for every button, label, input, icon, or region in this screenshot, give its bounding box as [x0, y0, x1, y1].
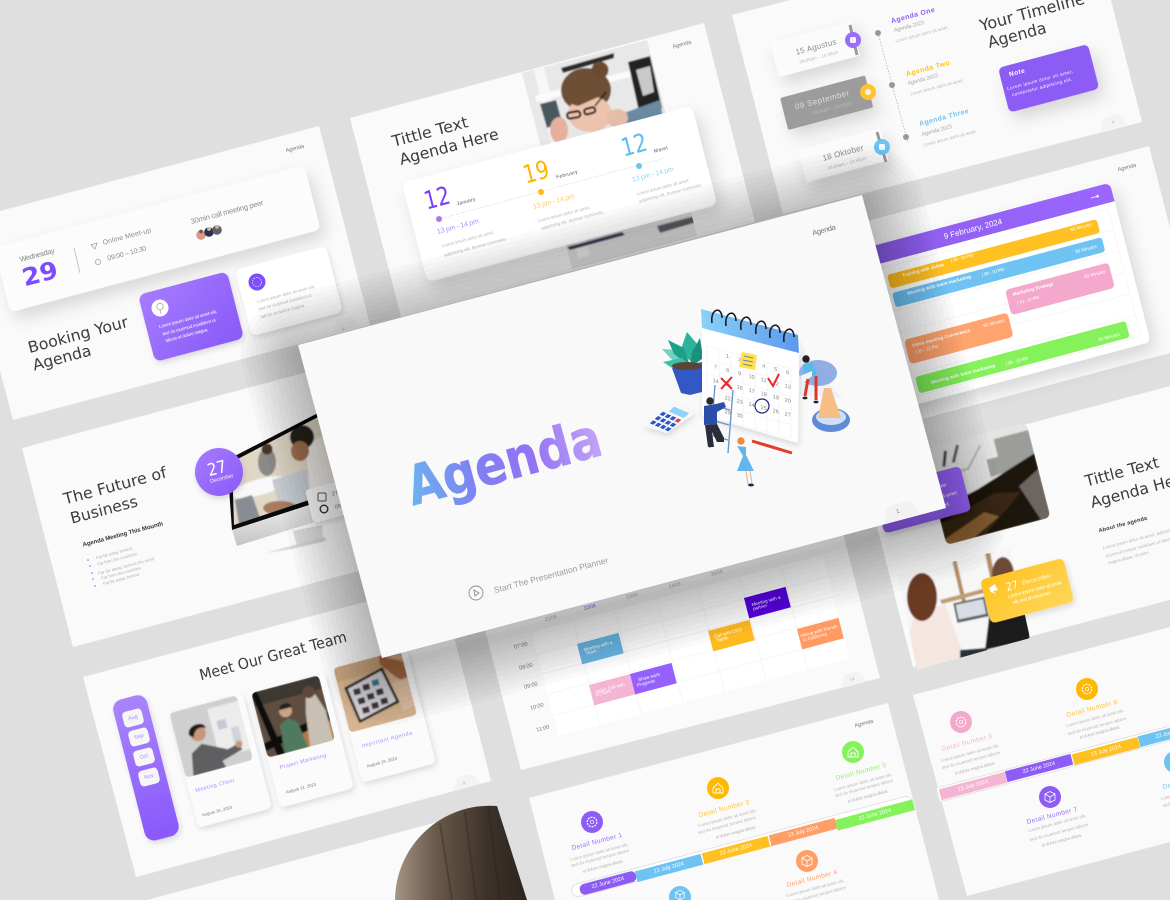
calendar table: 07:00 [514, 641, 528, 651]
timeline card with three dates: February [556, 169, 579, 181]
panel: cropped photo slide at bottom [147, 806, 527, 900]
calendar body: 2 [738, 357, 741, 364]
page number tab: 3 [341, 326, 345, 332]
calendar body: 16 [737, 384, 743, 392]
detail number 5: et dolore magna aliqua. [847, 788, 889, 804]
calendar body: 11 [761, 377, 767, 384]
timeline card with three dates: 12 [618, 128, 650, 162]
photo: lecture hall [930, 424, 1050, 544]
panel: daily schedule slide [792, 146, 1170, 440]
date ribbon: 13 July 2024 [1090, 744, 1122, 758]
detail number 5: Detail Number 5 [835, 762, 887, 782]
heading: tittle text agenda here: Agenda Here [397, 125, 501, 169]
event: meeting with a team: Team [585, 648, 597, 656]
date ribbon: 22 June 2024 [858, 808, 892, 822]
paragraph: magna aliqua. Ut enim. [1107, 550, 1150, 565]
schedule header: 9 February, 2024 [943, 217, 1004, 241]
heading: your timeline agenda: Agenda [986, 18, 1048, 52]
event: video meeting conrerence [904, 312, 1014, 364]
agenda label: Agenda [672, 39, 693, 50]
panel: future of business slide [22, 372, 358, 647]
event: marketing strategy: Marketing Strategy [1012, 281, 1054, 297]
detail number 8: et dolore magna aliqua. [1079, 724, 1121, 740]
heading: the future of business: The Future of [61, 463, 169, 509]
detail number 3: sed do eiusmod tempor labore [697, 815, 757, 835]
calendar table: 10:00 [530, 702, 544, 712]
detail number 3: Lorem ipsum dolor sit amet elit, [697, 808, 757, 828]
event: show work progress: Progress [637, 678, 656, 688]
event: video meeting conrerence: 60 Minutes [983, 318, 1006, 328]
paragraph [1102, 520, 1170, 565]
date card: 18 oktober [798, 128, 890, 182]
agenda items: Agenda 2023 [893, 20, 925, 34]
timeline card with three dates: 13 pm - 14 pm [436, 218, 480, 236]
photo: women at laptop [906, 552, 1030, 670]
timeline card with three dates: adipiscing elit. Aenean commodo [540, 209, 604, 231]
panel: about the agenda slide [862, 386, 1170, 675]
calculator [643, 402, 695, 433]
date card: 09 september: 09:00am – 10:30pm [812, 100, 852, 116]
event: meeting with a team [577, 633, 624, 664]
heading: booking your agenda [26, 313, 131, 374]
booking details card [0, 165, 321, 312]
calendar body: 4 [762, 363, 765, 370]
date badge: 27 december: 27 [205, 457, 229, 481]
date and time card [305, 475, 371, 523]
date badge: 27 december: December [210, 473, 234, 485]
team card: meeting client: August 16, 2023 [201, 804, 233, 817]
woman with clipboard [737, 437, 754, 486]
date and time card: 09 [334, 503, 342, 511]
date card: 18 oktober: 18 Oktober [822, 143, 865, 163]
team card: meeting client [169, 693, 272, 828]
calendar body: 14 [713, 378, 719, 386]
agenda label: Agenda [285, 143, 306, 154]
event: video call with a client [589, 674, 636, 705]
detail number 6: Lorem ipsum dolor sit amet elit, [940, 743, 1000, 763]
date ribbon: 22 June 2024 [719, 843, 753, 857]
panel: booking your agenda slide [0, 126, 370, 420]
yellow date card: 27 [1005, 578, 1019, 594]
date card: 09 september [780, 75, 876, 130]
timeline card with three dates: adipiscing elit. Aenean commodo [638, 182, 702, 204]
calendar body: 20 [785, 397, 791, 405]
agenda items: Agenda Two [905, 60, 951, 78]
date card: 15 agustus: 15 Agustus [795, 37, 837, 57]
calendar body [701, 309, 843, 443]
calendar body: 7 [714, 364, 717, 371]
event: hiking with friends: in California [803, 631, 828, 643]
team card: meeting client: Meeting Client [195, 778, 236, 794]
calendar body: 23 [737, 398, 743, 406]
calendar body: 22 [725, 395, 731, 403]
panel: detail timeline slide two [913, 627, 1170, 896]
heading: booking your agenda: Booking Your [26, 313, 131, 357]
timeline card with three dates: 19 [520, 155, 552, 189]
calendar table: 09:00 [524, 681, 538, 691]
event: call with ceo: Tatsik [716, 635, 729, 643]
calendar body: 8 [726, 368, 729, 374]
photo: round wooden interior [395, 806, 527, 900]
timeline card with three dates: 13 pm - 14 pm [631, 166, 675, 184]
calendar body: 15 [725, 381, 731, 389]
event: video meeting conrerence: | 11 – 12 PM [915, 344, 939, 354]
detail number 6: et dolore magna aliqua. [954, 760, 996, 776]
month sidebar: Sep [134, 733, 144, 741]
event: training with johns: Training with Johns [902, 262, 945, 278]
detail number 6 [940, 711, 1001, 776]
event: meeting with team marketing [892, 237, 1105, 308]
white note card: Lorem ipsum dolor sit amet elit, [256, 284, 316, 304]
event: show work progress: Show work [638, 672, 661, 682]
date card: 09 september: 09 September [794, 88, 850, 112]
panel: agenda cover slide [298, 195, 946, 658]
month sidebar: Nov [144, 773, 155, 781]
vertical dashed timeline [875, 30, 909, 143]
booking details card: Online Meet-up [102, 227, 152, 247]
agenda label: Agenda [854, 718, 875, 729]
page number tab: 1 [896, 508, 901, 515]
illustration: calendar with people [643, 309, 850, 486]
agenda items: Lorem ipsum dolor sit amet, [923, 128, 977, 148]
calendar body: 12 [773, 380, 779, 388]
calendar table: 21/09 [544, 614, 558, 623]
event: hiking with friends [797, 618, 844, 649]
detail number 4: Detail Number 4 [786, 869, 838, 889]
calendar body: 29 [725, 409, 731, 417]
event: training with johns: | 08 - 09 PM [950, 253, 974, 263]
team card: important agenda: August 19, 2023 [366, 755, 398, 768]
title: agenda: Agenda [400, 406, 608, 518]
calendar body: 24 [749, 402, 755, 409]
cover slide shadow [300, 204, 948, 667]
page number tab [450, 771, 482, 791]
calendar table: 23/09 [625, 592, 639, 601]
event: meeting with a team: Meeting with a [583, 640, 613, 652]
event: marketing strategy: | 10 - 11 PM [1016, 295, 1040, 305]
date card: 15 agustus [770, 21, 861, 77]
page number tab [878, 498, 923, 525]
purple note card: Lorem ipsum dolor sit amet, [1007, 69, 1073, 91]
photo: woman with glasses [522, 40, 697, 269]
purple note card [138, 271, 244, 362]
detail number 7: Detail Number 7 [1026, 806, 1078, 826]
bullet list: Far far away, behind [103, 572, 140, 586]
calendar table: 24/09 [668, 581, 682, 590]
bullet list: Far from the countries [101, 565, 142, 581]
page number tab [330, 314, 362, 334]
page number tab: 14 [849, 676, 856, 682]
calendar table: 22/09 [583, 603, 597, 612]
ladder and climbing man [704, 385, 733, 453]
calendar body: 6 [786, 370, 789, 377]
event: meeting with team marketing: Meeting with team marketing [907, 274, 972, 296]
timeline card with three dates: 13 pm - 14 pm [532, 193, 576, 211]
detail number 7: Lorem ipsum dolor sit amet elit, [1027, 813, 1087, 833]
calendar table [514, 555, 849, 736]
red pencil [752, 441, 792, 453]
page number tab [1097, 112, 1129, 132]
event: training with johns [887, 219, 1100, 289]
agenda items: Agenda 2023 [907, 73, 939, 87]
detail number 1: et dolore magna aliqua. [582, 858, 624, 874]
detail number 8: Lorem ipsum dolor sit amet elit, [1065, 708, 1125, 728]
purple note card: consectetur adipiscing elit. [1011, 77, 1073, 97]
bullet list: Far far away, behind the word [97, 556, 155, 576]
team card: project marketing: Project Marketing [279, 753, 327, 771]
timeline card with three dates: Lorem ipsum dolor sit amet, [636, 178, 690, 196]
detail number 9 [1160, 751, 1170, 808]
date card: 18 oktober: 09:00am – 10:30pm [827, 155, 867, 171]
heading: your timeline agenda [977, 0, 1087, 52]
detail number 8: Detail Number 8 [1066, 699, 1118, 719]
yellow date card [980, 558, 1074, 624]
agenda label: Agenda [1117, 162, 1138, 173]
page number tab [837, 669, 869, 689]
timeline card with three dates: Lorem ipsum dolor sit amet, [537, 205, 591, 223]
calendar table: 11:00 [536, 724, 550, 734]
detail number 8 [1065, 678, 1127, 740]
event: meeting with a partner [744, 587, 791, 618]
schedule header [820, 183, 1115, 278]
heading: the future of business [61, 463, 169, 528]
date badge: 27 december [195, 448, 243, 496]
booking details card: 09:00 – 10:30 [107, 245, 147, 263]
detail number 5 [833, 741, 894, 804]
white note card [235, 246, 343, 336]
agenda items: Lorem ipsum dolor sit amet, [910, 77, 964, 97]
detail number 3: Detail Number 3 [698, 799, 750, 819]
event: meeting with a partner: Meeting with a [751, 595, 781, 607]
timeline card with three dates [402, 106, 717, 282]
white note card: labore et dolore magna. [260, 303, 306, 319]
agenda items [890, 7, 977, 148]
event: meeting with team marketing: | 09 - 10 PM [981, 267, 1005, 277]
calendar body: 26 [773, 408, 779, 416]
event: meeting with team marketing green [915, 321, 1130, 394]
purple note card: Lorem ipsum dolor sit amet elit, [158, 309, 218, 329]
panel: weekly calendar slide [470, 479, 880, 770]
event: video call with a client: Video Call with [595, 682, 626, 694]
detail number 3: et dolore magna aliqua. [715, 824, 757, 840]
subheading: about the agenda: About the agenda [1098, 515, 1149, 534]
date ribbon: 13 July 2024 [957, 779, 989, 793]
bullet list [87, 546, 155, 587]
calendar body: 9 [738, 371, 741, 378]
detail number 5: Lorem ipsum dolor sit amet elit, [833, 772, 893, 792]
calendar body: 30 [737, 412, 743, 420]
purple note card: Note [1008, 67, 1026, 78]
calendar body: 27 [785, 411, 791, 419]
agenda items: Agenda One [890, 7, 936, 25]
calendar body: 13 [785, 383, 791, 391]
event: show work progress [630, 663, 677, 694]
calendar body: 5 [774, 367, 777, 373]
purple date card: elit, sed do eiusmod. [905, 501, 951, 519]
team card: project marketing [251, 673, 354, 808]
calendar body: 17 [749, 388, 755, 395]
event: hiking with friends: Hiking with friends [800, 624, 839, 638]
bullet list: Far from the countries [97, 551, 138, 567]
timeline card with three dates: 12 [421, 181, 453, 215]
timeline card with three dates: adipiscing elit. Aenean commodo [443, 236, 507, 258]
detail number 7: et dolore magna aliqua. [1041, 832, 1083, 848]
event: marketing strategy [1005, 262, 1115, 315]
month sidebar: Aug [128, 714, 138, 722]
detail number 8: sed do eiusmod tempor labore [1067, 716, 1127, 736]
event: training with johns: 60 Minutes [1070, 222, 1093, 232]
yellow date card: December [1022, 573, 1052, 587]
date card: 15 agustus: 09:00am – 10:30pm [799, 49, 839, 65]
date and time card: 27 [331, 490, 339, 498]
detail number 7: sed do eiusmod tempor labore [1029, 822, 1089, 842]
yellow date card: elit, sed do eiusmod. [1012, 590, 1052, 606]
subheading: Agenda Meeting This Mounth [82, 521, 164, 549]
date ribbon: 22 June 2024 [1022, 761, 1056, 775]
purple date card: Lorem ipsum dolor sit amet [898, 490, 958, 511]
agenda items: Agenda 2023 [921, 124, 953, 138]
date ribbon: 13 July 2024 [653, 861, 685, 875]
booking details card: 30min call meeting peer [190, 198, 265, 226]
calendar body: 1 [726, 354, 729, 360]
event: meeting with team marketing: 60 Minutes [1075, 244, 1098, 254]
white note card: sed do eiusmod incididunt ut [258, 292, 313, 312]
event: video call with a client: A Client [595, 688, 612, 697]
calendar body: 19 [773, 394, 779, 402]
month sidebar [111, 693, 181, 843]
detail number 1: sed do eiusmod tempor labore [570, 848, 630, 868]
agenda label: Agenda [811, 222, 838, 237]
purple date card [873, 466, 971, 534]
timeline card with three dates: Maret [653, 145, 669, 155]
booking details card: 29 [19, 256, 61, 292]
page number tab: 4 [1111, 119, 1115, 125]
event: meeting with team marketing green: | 08 - 10 PM [1005, 356, 1029, 366]
heading: booking your agenda: Agenda [31, 342, 93, 374]
event: meeting with team marketing green: 60 Minutes [1098, 332, 1121, 342]
detail number 1: Detail Number 1 [571, 832, 623, 852]
heading: meet our great team: Meet Our Great Team [197, 628, 349, 684]
purple date card: December [922, 482, 948, 494]
schedule card [820, 183, 1151, 419]
event: call with ceo: Call with CEO [714, 627, 743, 639]
detail number 1 [569, 811, 630, 874]
date ribbon [570, 795, 915, 898]
event: meeting with a partner: partner [752, 603, 768, 611]
subtitle: Start The Presentation Planner [493, 555, 609, 595]
heading: the future of business: Business [68, 492, 140, 528]
detail number 1: Lorem ipsum dolor sit amet elit, [569, 842, 629, 862]
calendar table: 25/09 [710, 569, 724, 578]
yellow date card: Lorem ipsum dolor sit amet [1008, 580, 1063, 600]
detail number 6: sed do eiusmod tempor labore [941, 750, 1001, 770]
date ribbon: 13 July 2024 [787, 825, 819, 839]
detail number 5: sed do eiusmod tempor labore [834, 778, 894, 798]
team card: important agenda: Important Agenda [361, 730, 414, 750]
agenda items: Agenda Three [918, 108, 970, 128]
event: marketing strategy: 60 Minutes [1084, 269, 1107, 279]
hourglass and sitting man [799, 355, 850, 432]
calendar body: 25 [761, 405, 767, 412]
detail number 4 [785, 850, 847, 900]
detail number 2 icon [669, 886, 691, 900]
panel: your timeline agenda slide [732, 0, 1142, 214]
plant [662, 332, 703, 395]
monitor with meeting photo [229, 414, 334, 552]
month sidebar: Oct [139, 753, 149, 761]
date ribbon [936, 719, 1170, 802]
purple note card: labore et dolore magna. [165, 327, 209, 343]
panel: meet our great team slide [83, 582, 491, 877]
detail number 7 [1026, 786, 1089, 848]
timeline card with three dates: Lorem ipsum dolor sit amet, [441, 230, 495, 248]
calendar body: 10 [749, 374, 755, 381]
team card: important agenda [333, 648, 436, 783]
bullet list: Far far away, behind [96, 546, 133, 560]
event: meeting with team marketing green: Meeting with team marketing [931, 363, 996, 385]
detail number 4: Lorem ipsum dolor sit amet elit, [785, 878, 845, 898]
purple note card: sed do eiusmod incididunt ut [162, 317, 217, 337]
play icon [469, 586, 483, 600]
heading: tittle text agenda here: Tittle Text [389, 113, 470, 151]
timeline card with three dates: January [456, 197, 476, 207]
panel: title text agenda here slide [350, 23, 755, 317]
date ribbon: 22 June 2024 [591, 876, 625, 890]
agenda items: Lorem ipsum dolor sit amet, [895, 24, 949, 44]
calendar body: 18 [761, 391, 767, 398]
heading: tittle text agenda here [1082, 453, 1170, 512]
page number tab: 9 [462, 780, 466, 786]
event: video meeting conrerence: Video meeting Conrerence [911, 328, 971, 348]
detail number 6: Detail Number 6 [941, 733, 993, 753]
heading: tittle text agenda here: Tittle Text [1082, 453, 1161, 491]
panel: detail timeline slide one [529, 703, 939, 900]
calendar table: 08:00 [519, 662, 533, 672]
detail number 3 [697, 777, 757, 840]
booking details card: Wednesday [18, 246, 56, 264]
purple note card [998, 44, 1099, 113]
team card: project marketing: August 12, 2023 [285, 781, 317, 794]
event: call with ceo [708, 620, 755, 651]
